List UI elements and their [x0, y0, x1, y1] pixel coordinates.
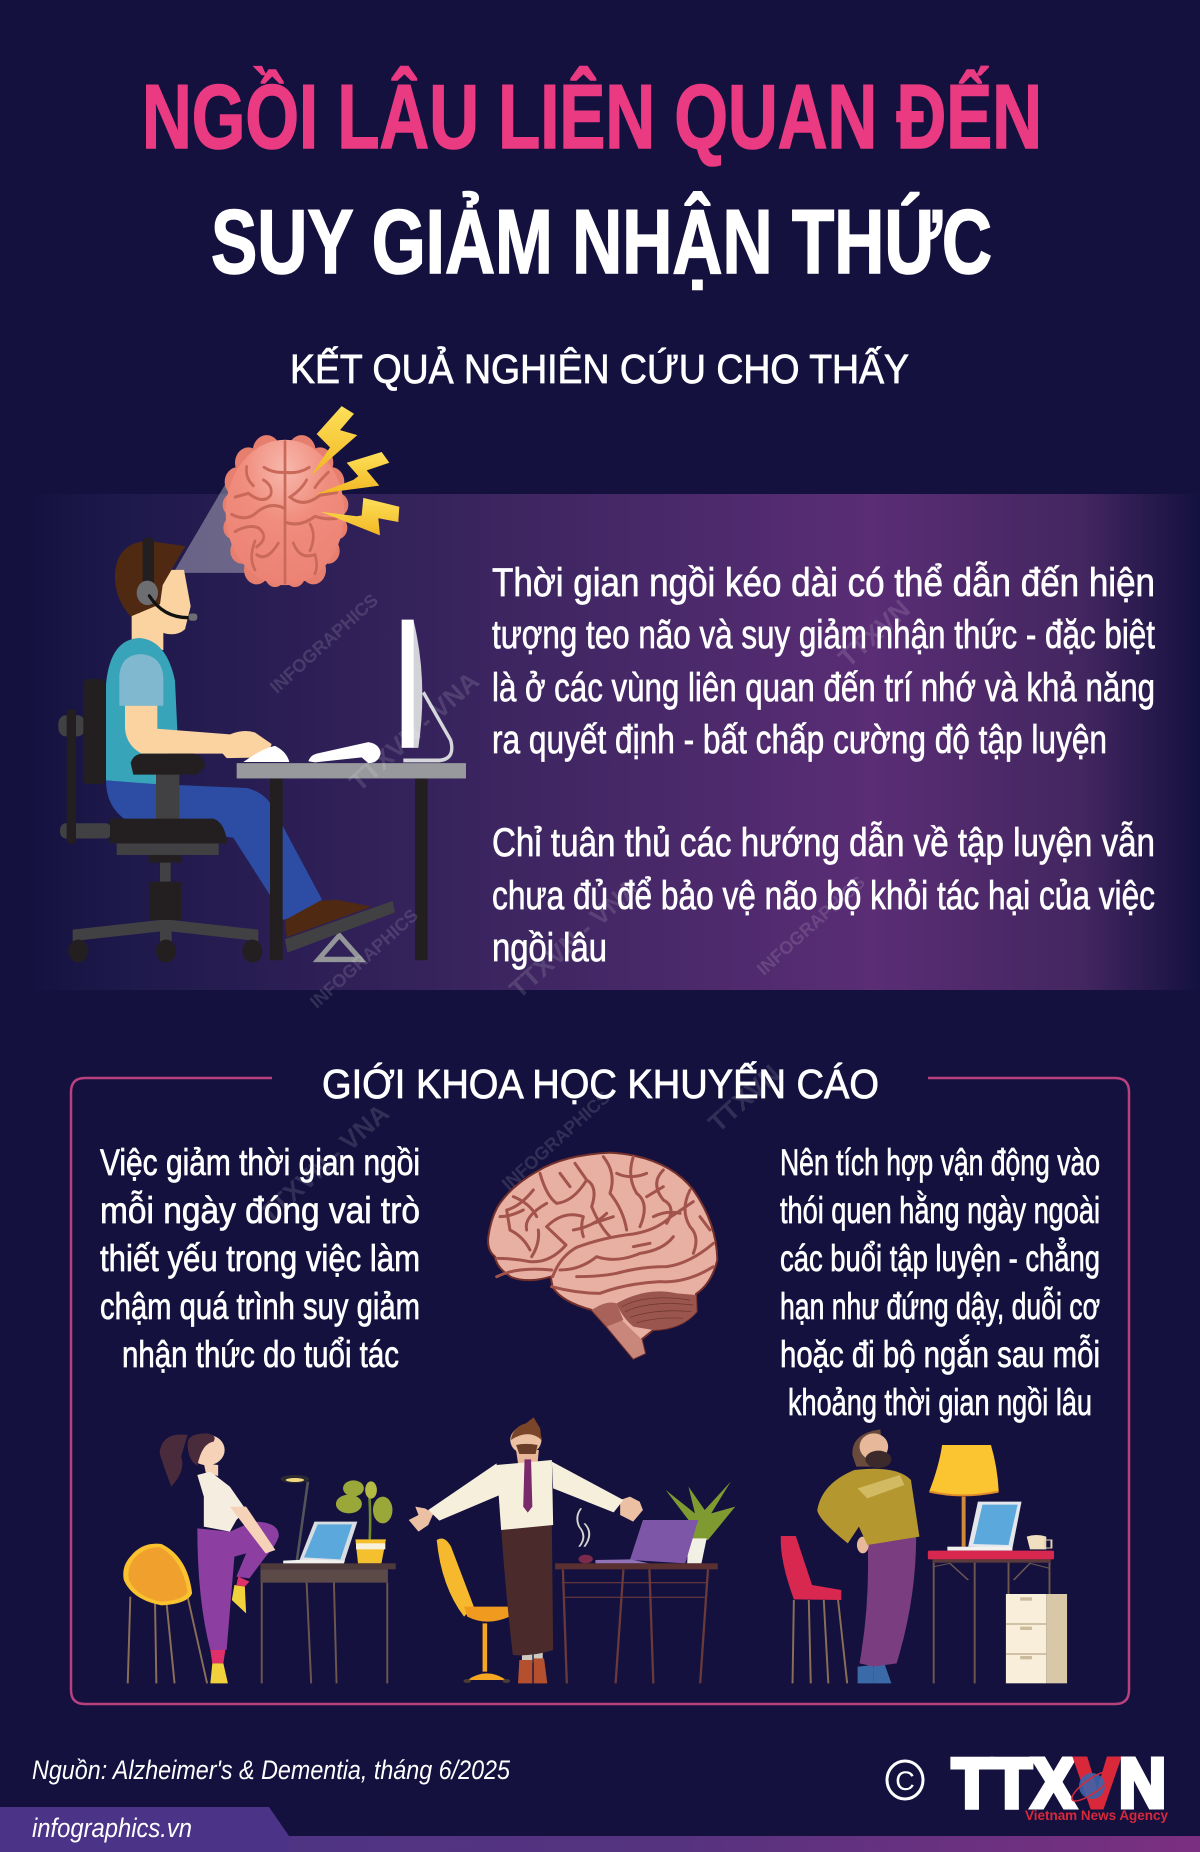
icon: light cone: [173, 476, 257, 573]
logo: TTXVN: TTXVN: [952, 1744, 1166, 1822]
desk with cup, laptop and plant: [555, 1482, 735, 1683]
watermarks: TTXVN - VNA: [343, 665, 485, 797]
neck and head: [115, 541, 191, 650]
logo: TTXVN: Vietnam News Agency: [1025, 1807, 1168, 1823]
text block: left recommendation: mỗi ngày đóng vai trò: [100, 1190, 420, 1231]
watermarks: INFOGRAPHICS: [306, 905, 422, 1012]
trousers: [106, 780, 322, 920]
watermarks: INFOGRAPHICS: [498, 1087, 614, 1194]
text block: right recommendation: các buổi tập luyện - chẳng: [780, 1237, 1100, 1279]
illustration: person sitting at desk with brain: [58, 406, 466, 963]
monitor: [402, 620, 452, 760]
watermarks: TTXVN: [832, 594, 916, 673]
arm and hand: [119, 654, 272, 758]
text block: left recommendation: nhận thức do tuổi tác: [122, 1334, 399, 1375]
chair back: [58, 679, 112, 843]
title: [142, 66, 1042, 293]
man: [409, 1417, 643, 1683]
desk: [237, 763, 466, 960]
text block: right recommendation: hoặc đi bộ ngắn sau mỗi: [780, 1334, 1100, 1375]
heading: research results: KẾT QUẢ NGHIÊN CỨU CHO THẤY: [290, 346, 909, 392]
desk with lamp, laptop, mug and cabinet: [928, 1445, 1067, 1683]
text block: right recommendation: khoảng thời gian ngồi lâu: [788, 1382, 1092, 1423]
text block: findings: ngồi lâu: [492, 926, 607, 970]
watermarks: [253, 590, 916, 1229]
headset: [137, 537, 197, 621]
text block: findings: [492, 560, 1155, 970]
text block: left recommendation: [100, 1142, 420, 1375]
bearded man: [817, 1429, 919, 1683]
icon: copyright: C: [895, 1766, 915, 1796]
footrest and shoe: [285, 900, 395, 959]
armrest and seat: [68, 754, 262, 963]
heading: recommendations: GIỚI KHOA HỌC KHUYẾN CÁO: [322, 1061, 879, 1107]
body: [160, 1433, 279, 1683]
chair: [123, 1544, 207, 1683]
orange chair: [437, 1538, 510, 1683]
text block: left recommendation: chậm quá trình suy giảm: [100, 1286, 420, 1327]
watermarks: INFOGRAPHICS: [266, 590, 382, 697]
watermarks: TTXVN: [702, 1059, 786, 1138]
footer bar and tab: [0, 1807, 1200, 1852]
desk with laptop, lamp and plant: [260, 1475, 396, 1683]
icon: copyright: [887, 1761, 923, 1799]
watermarks: INFOGRAPHICS: [753, 872, 869, 979]
red chair: [781, 1536, 847, 1683]
watermarks: TTXVN - VNA: [253, 1097, 395, 1229]
icon: brain top view: [223, 435, 348, 587]
text block: left recommendation: thiết yếu trong việc làm: [100, 1238, 420, 1279]
icon: large brain side view: [488, 1153, 717, 1359]
watermarks: TTXVN - VNA: [503, 872, 645, 1004]
mouse and keyboard: [243, 742, 381, 763]
icon: lightning bolts: [311, 406, 399, 535]
panel: research findings band: [30, 494, 1200, 990]
text block: right recommendation: [780, 1142, 1100, 1423]
website label: infographics.vn: [32, 1813, 192, 1843]
panel: recommendations frame: [71, 1078, 1129, 1704]
shirt: [106, 638, 177, 785]
source note: Nguồn: Alzheimer's & Dementia, tháng 6/2025: [32, 1755, 511, 1785]
text block: left recommendation: Việc giảm thời gian ngồi: [100, 1142, 420, 1183]
illustration: woman stretching at desk: [123, 1417, 1067, 1683]
